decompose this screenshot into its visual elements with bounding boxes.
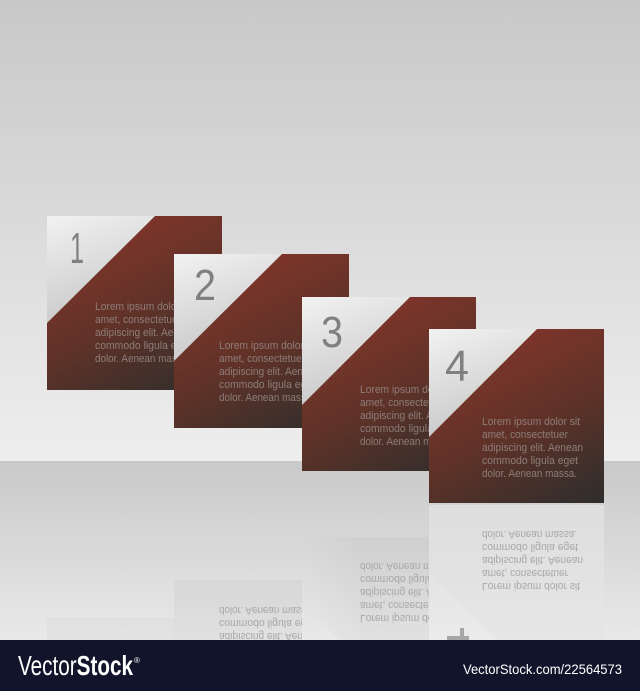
reflection: card 2: commodo ligula eget bbox=[219, 617, 315, 629]
card 2 background bbox=[174, 254, 349, 428]
card 3 number: 3 bbox=[321, 308, 343, 357]
card 3 text bbox=[360, 384, 461, 448]
card 1 background bbox=[47, 216, 222, 390]
reflection: card 2: dolor. Aenean massa. bbox=[219, 604, 314, 616]
reflection: card 2 bbox=[219, 607, 302, 640]
card 4 text: adipiscing elit. Aenean bbox=[482, 442, 583, 454]
footer bar bbox=[0, 640, 640, 691]
card 1 number: 1 bbox=[70, 224, 84, 273]
footer logo: VectorStock bbox=[18, 650, 133, 681]
background wall bbox=[0, 0, 640, 461]
card 3 text: Lorem ipsum dolor sit bbox=[360, 384, 458, 396]
reflection: card 1 bbox=[47, 618, 174, 640]
reflection: card 3: commodo ligula eget bbox=[360, 573, 456, 585]
reflection: card 4: dolor. Aenean massa. bbox=[482, 528, 577, 540]
reflection: card 4: amet, consectetuer bbox=[482, 567, 568, 579]
card 1 text: Lorem ipsum dolor sit bbox=[95, 301, 193, 313]
card 3 text: commodo ligula eget bbox=[360, 423, 456, 435]
card 3 corner triangle bbox=[302, 297, 410, 405]
card 2 corner triangle bbox=[174, 254, 282, 361]
card 1 text: adipiscing elit. Aenean bbox=[95, 327, 196, 339]
footer registered mark: ® bbox=[134, 656, 140, 665]
card 4 bbox=[429, 329, 604, 503]
card 2 text: amet, consectetuer bbox=[219, 353, 305, 365]
card 1 text: amet, consectetuer bbox=[95, 314, 181, 326]
card 3 bbox=[302, 297, 476, 471]
reflection: card 3: dolor. Aenean massa. bbox=[360, 560, 455, 572]
reflection: card 4: adipiscing elit. Aenean bbox=[482, 554, 583, 566]
reflection: card 4: Lorem ipsum dolor sit bbox=[482, 580, 580, 592]
card 1 bbox=[47, 216, 222, 390]
reflection: card 2: adipiscing elit. Aenean bbox=[219, 630, 320, 642]
card 4 text: commodo ligula eget bbox=[482, 455, 578, 467]
card 3 text: adipiscing elit. Aenean bbox=[360, 410, 461, 422]
card 1 text bbox=[95, 301, 196, 365]
card 2 text: Lorem ipsum dolor sit bbox=[219, 340, 317, 352]
floor bbox=[0, 461, 640, 640]
card 4 background bbox=[429, 329, 604, 503]
card 2 text bbox=[219, 340, 320, 404]
reflections of the cards bbox=[219, 505, 604, 640]
card 4 text bbox=[482, 416, 583, 480]
reflection: card 4: commodo ligula eget bbox=[482, 541, 578, 553]
card 1 text: dolor. Aenean massa. bbox=[95, 353, 190, 365]
card 4 corner triangle bbox=[429, 329, 537, 437]
card 2 number: 2 bbox=[194, 261, 216, 310]
reflection: card 3: Lorem ipsum dolor sit bbox=[360, 612, 458, 624]
card 2 bbox=[174, 254, 349, 428]
card 1 corner triangle bbox=[47, 216, 155, 323]
reflection: card 3: adipiscing elit. Aenean bbox=[360, 586, 461, 598]
card 4 text: amet, consectetuer bbox=[482, 429, 568, 441]
card 4 number: 4 bbox=[445, 342, 469, 391]
card 3 text: dolor. Aenean massa. bbox=[360, 436, 455, 448]
card 4 text: Lorem ipsum dolor sit bbox=[482, 416, 580, 428]
reflection: card 3 bbox=[360, 563, 429, 623]
card 3 background bbox=[302, 297, 476, 471]
footer url: VectorStock.com/22564573 bbox=[463, 661, 622, 677]
reflection: card 3: amet, consectetuer bbox=[360, 599, 446, 611]
card 2 text: commodo ligula eget bbox=[219, 379, 315, 391]
card 1 text: commodo ligula eget bbox=[95, 340, 191, 352]
card 2 text: adipiscing elit. Aenean bbox=[219, 366, 320, 378]
card 2 text: dolor. Aenean massa. bbox=[219, 392, 314, 404]
card 3 text: amet, consectetuer bbox=[360, 397, 446, 409]
card 4 text: dolor. Aenean massa. bbox=[482, 468, 577, 480]
reflection: card 4 bbox=[429, 505, 604, 640]
